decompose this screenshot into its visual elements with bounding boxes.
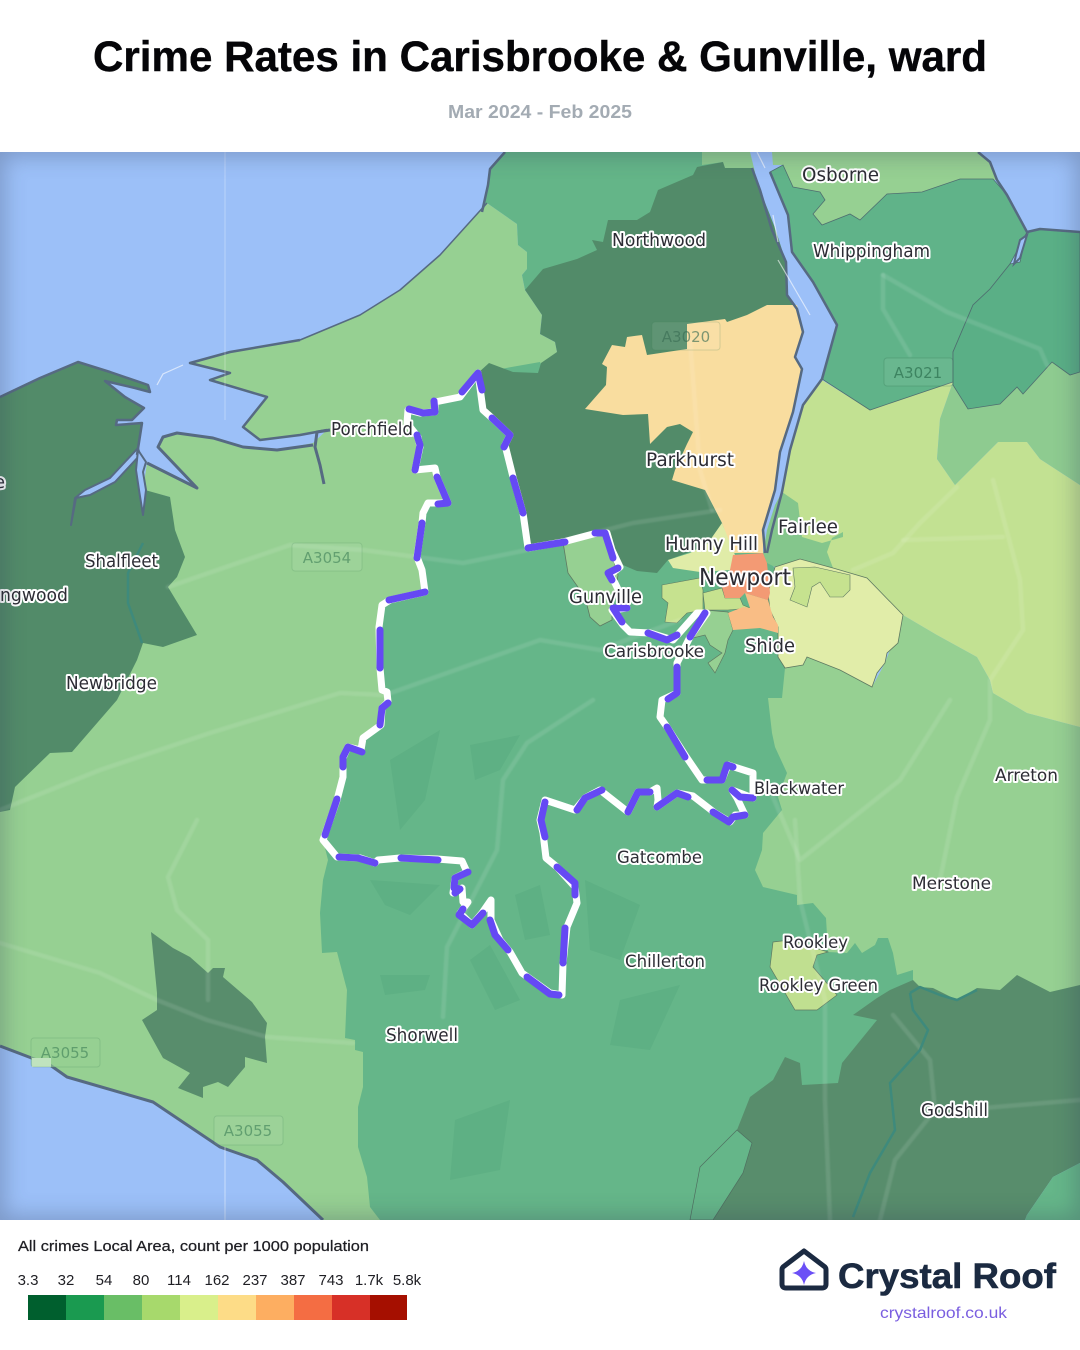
coastlines <box>0 152 1080 1220</box>
road shield: A3020: A3020 <box>662 328 710 346</box>
region: north light patch <box>702 152 755 172</box>
legend scale labels: 114 <box>167 1272 191 1289</box>
place labels: Newbridge <box>66 673 157 694</box>
website link: crystalroof.co.uk <box>880 1305 1008 1322</box>
legend scale labels: 387 <box>280 1272 306 1289</box>
place labels: Shide <box>745 635 795 657</box>
place labels: Newport <box>699 565 791 591</box>
region: east pale yellow <box>768 559 903 687</box>
place labels: Osborne <box>802 164 879 186</box>
place labels: Rookley <box>783 933 848 953</box>
region: Newport centre patch <box>703 588 750 610</box>
place labels: Whippingham <box>813 241 930 262</box>
road shield: A3055 west <box>31 1038 100 1067</box>
region: east light-green Merstone <box>755 615 1080 998</box>
region: north mid green <box>484 152 723 290</box>
place labels: Northwood <box>612 230 706 251</box>
place labels: Godshill <box>921 1100 988 1121</box>
region: Whippingham mid green <box>770 165 1027 410</box>
map edge vignette <box>0 152 1080 1220</box>
region: Parkhurst cream <box>585 305 803 553</box>
road network <box>0 275 1080 1220</box>
place labels: Arreton <box>995 766 1058 786</box>
region: Osborne light green <box>772 152 997 225</box>
region: Carisbrooke green patch <box>693 610 733 673</box>
legend scale labels: 54 <box>96 1272 112 1289</box>
legend scale labels: 1.7k <box>355 1272 384 1289</box>
region: Shide peach <box>728 593 778 633</box>
legend <box>18 1238 422 1320</box>
legend colour bar <box>28 1295 407 1320</box>
place labels: Porchfield <box>331 419 413 440</box>
legend scale labels: 162 <box>204 1272 230 1289</box>
place labels: Carisbrooke <box>604 642 704 662</box>
legend scale labels: 80 <box>133 1272 149 1289</box>
legend scale labels <box>18 1272 422 1289</box>
road shield: A3054: A3054 <box>303 549 351 567</box>
subtitle: date range: Mar 2024 - Feb 2025 <box>448 102 632 122</box>
region: south-east corner patch <box>1025 1163 1080 1220</box>
road shield: A3055 east <box>214 1116 283 1145</box>
water: creek at north east <box>1014 235 1027 264</box>
region: south dark Godshill <box>713 975 1080 1220</box>
legend scale labels: 5.8k <box>393 1272 422 1289</box>
place labels: ngwood <box>0 585 68 606</box>
region: Gunville light patch <box>563 533 618 626</box>
legend scale labels: 237 <box>242 1272 268 1289</box>
road shield: A3055 east: A3055 <box>224 1122 272 1140</box>
legend scale labels: 3.3 <box>18 1272 38 1289</box>
place labels: Blackwater <box>754 779 844 799</box>
region: Fairlee green <box>763 492 843 568</box>
place labels: Fairlee <box>778 516 838 538</box>
water: estuary inlets <box>71 448 146 525</box>
region: Newport west patch <box>662 578 703 623</box>
place labels: Gatcombe <box>617 848 702 868</box>
icon: purple star <box>792 1261 816 1285</box>
region: east light green <box>937 362 1080 485</box>
legend title: All crimes Local Area, count per 1000 population <box>18 1238 369 1255</box>
place labels: Rookley Green <box>759 976 878 996</box>
region: east dark-mid green <box>953 229 1080 409</box>
legend scale labels: 743 <box>318 1272 344 1289</box>
region: Rookley pale <box>770 940 837 1010</box>
road shield: A3021: A3021 <box>894 364 942 382</box>
water background <box>0 152 1080 1220</box>
region: main ward mid green <box>320 362 913 1220</box>
road shield: A3054 <box>292 543 362 571</box>
water: channel markers <box>157 152 810 1220</box>
water: Medina river banks <box>752 168 837 553</box>
ward boundary: purple dashes <box>325 373 753 995</box>
logo: Crystal Roof <box>782 1251 1056 1322</box>
region: inner yellow-green patch <box>790 567 850 607</box>
ward boundary: white base <box>323 373 753 995</box>
legend scale labels: 32 <box>58 1272 74 1289</box>
streams <box>128 543 977 1217</box>
region: west light-green land <box>0 203 600 1220</box>
place labels: Merstone <box>912 874 991 894</box>
road shield: A3055 west: A3055 <box>41 1044 89 1062</box>
road shield: A3021 <box>884 358 953 386</box>
region: south-west patch <box>690 1130 752 1220</box>
region: Newport salmon <box>722 553 770 600</box>
ward woodland texture <box>370 730 680 1180</box>
icon: house outline <box>782 1251 826 1288</box>
place labels: Shalfleet <box>85 551 158 572</box>
place labels: Chillerton <box>625 952 705 972</box>
place labels: Gunville <box>569 586 642 608</box>
road shield: A3020 <box>652 322 720 350</box>
place labels: Shorwell <box>386 1025 458 1046</box>
place labels: Parkhurst <box>646 449 734 471</box>
region: west dark Shalfleet <box>0 362 197 812</box>
place labels <box>0 164 1058 1121</box>
logo wordmark: Crystal Roof <box>838 1257 1056 1296</box>
title: Crime Rates in Carisbrooke & Gunville, ward <box>93 33 987 81</box>
region: east yellow-green <box>782 380 1080 727</box>
place labels: Hunny Hill <box>665 533 758 555</box>
region: south-west dark blob <box>142 932 267 1098</box>
region: Hunny Hill pale <box>668 523 735 572</box>
map <box>0 152 1080 1220</box>
region: north-west dark ward <box>478 162 797 573</box>
